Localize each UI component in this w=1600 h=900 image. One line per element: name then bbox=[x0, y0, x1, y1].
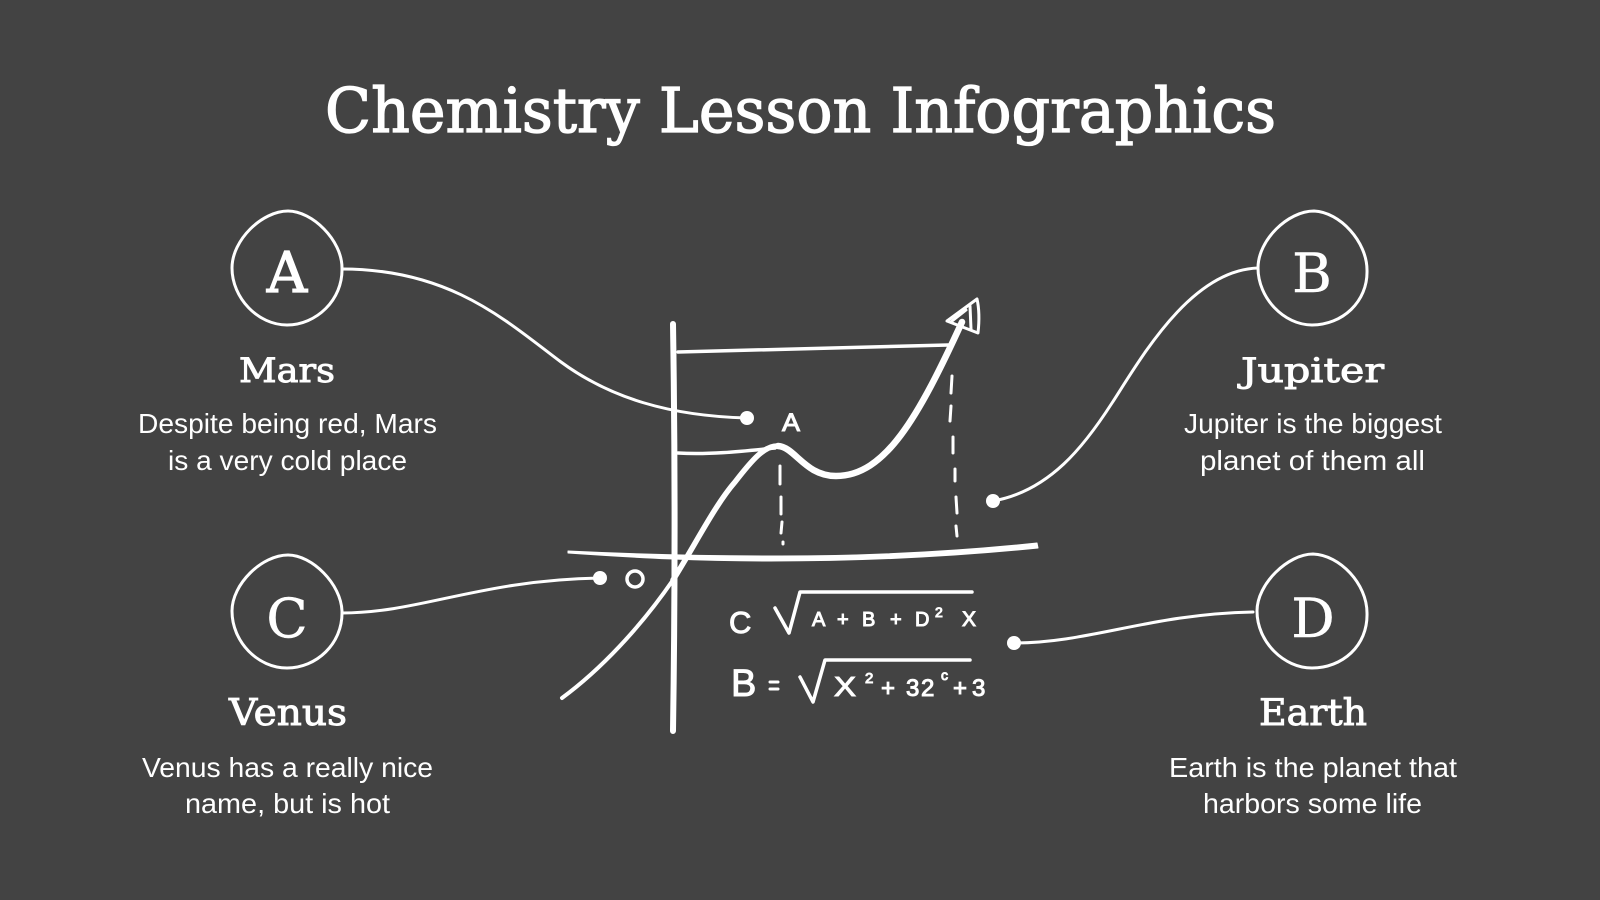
horizontal axis bbox=[568, 543, 1038, 561]
vertical axis bbox=[673, 324, 674, 731]
text: Earth description: harbors some life bbox=[1203, 788, 1422, 819]
text: Jupiter description: planet of them all bbox=[1200, 445, 1425, 476]
text: Venus description: Venus has a really nice bbox=[142, 752, 433, 783]
connector: B to graph bbox=[986, 268, 1258, 508]
icon: circle D bbox=[1257, 554, 1367, 668]
text: Jupiter description: Jupiter is the biggest bbox=[1184, 408, 1442, 439]
icon: circle A: A bbox=[266, 241, 308, 306]
icon: circle A bbox=[232, 211, 342, 325]
chart: hand-drawn graph bbox=[562, 299, 1038, 731]
dashed lines bbox=[780, 376, 957, 544]
label: A: A bbox=[782, 409, 800, 437]
icon: circle D: D bbox=[1291, 587, 1335, 650]
icon: circle B: B bbox=[1292, 242, 1332, 305]
text: Earth description bbox=[1169, 752, 1457, 819]
text: Mars description: Despite being red, Mars bbox=[138, 408, 437, 439]
formula: C: A+B+D bbox=[812, 609, 929, 631]
heading: Jupiter: Jupiter bbox=[1237, 351, 1385, 391]
formula: C: C bbox=[729, 605, 751, 640]
arrowhead bbox=[947, 299, 979, 333]
title: Chemistry Lesson Infographics bbox=[325, 74, 1276, 147]
formula: B bbox=[731, 660, 985, 705]
icon: circle B bbox=[1258, 211, 1367, 325]
label: O bbox=[627, 571, 643, 587]
connector: C to graph bbox=[342, 571, 607, 613]
text: Jupiter description bbox=[1184, 408, 1442, 476]
text: Mars description: is a very cold place bbox=[168, 445, 407, 476]
text: Venus description bbox=[142, 752, 433, 819]
panel: Earth bbox=[1169, 554, 1457, 819]
panel: Jupiter bbox=[1184, 211, 1442, 476]
connector: A to graph bbox=[342, 269, 754, 425]
top guide line bbox=[678, 345, 948, 352]
formula: B: +3 bbox=[953, 675, 985, 702]
lower guide line bbox=[678, 448, 775, 454]
icon: circle C: C bbox=[266, 587, 308, 650]
formula: C bbox=[729, 592, 976, 640]
text: Mars description bbox=[138, 408, 437, 476]
formula: B: c bbox=[941, 667, 948, 683]
formula: B: +32 bbox=[881, 675, 934, 702]
rising curve bbox=[562, 322, 962, 698]
panel: Mars bbox=[138, 211, 437, 476]
heading: Earth: Earth bbox=[1259, 693, 1367, 734]
icon: circle C bbox=[232, 555, 342, 668]
formula: C: X bbox=[962, 608, 976, 631]
formula: B: 2 bbox=[865, 670, 873, 687]
panel: Venus bbox=[142, 555, 433, 819]
connector: D to graph bbox=[1007, 612, 1253, 650]
formula: C: 2 bbox=[935, 604, 943, 620]
text: Earth description: Earth is the planet that bbox=[1169, 752, 1457, 783]
formula: B: B bbox=[731, 663, 756, 705]
formula: B: X bbox=[834, 671, 856, 702]
heading: Mars: Mars bbox=[239, 351, 335, 391]
heading: Venus: Venus bbox=[228, 693, 347, 734]
text: Venus description: name, but is hot bbox=[185, 788, 390, 819]
